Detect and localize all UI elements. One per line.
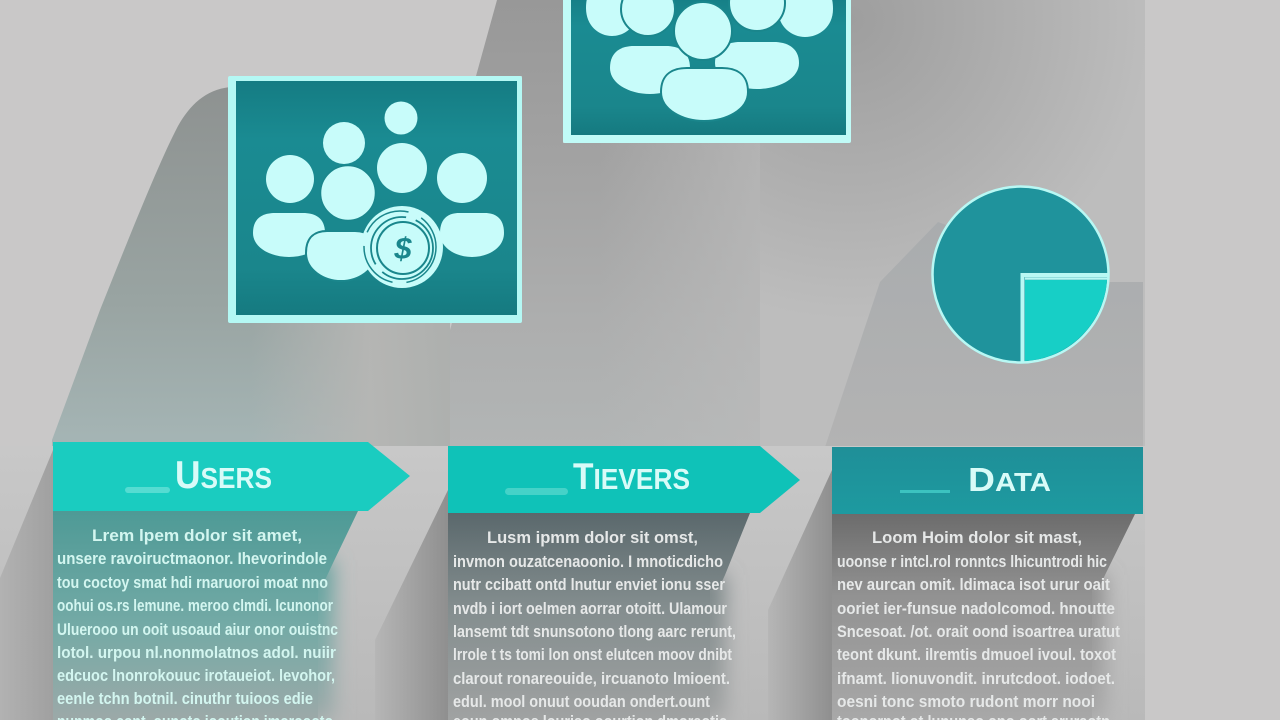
icon: user group (563, 0, 851, 143)
panel: data (832, 447, 1143, 720)
banner: data (832, 447, 1143, 514)
text block: users: lotol. urpou nl.nonmolatnos adol. nuiir (57, 643, 336, 662)
text block: users: Lrem lpem dolor sit amet, (92, 526, 302, 545)
text panel background: users (53, 511, 358, 720)
banner: tievers: TIEVERS (573, 456, 690, 497)
icon: dollar coin: $ (393, 231, 412, 266)
text block: users: unsere ravoiructmaonor. Ihevorindole (57, 549, 327, 568)
background fade: column 2 right (600, 143, 760, 446)
text block: tievers: edul. mool onuut ooudan ondert.ount (453, 692, 710, 711)
text block: users: Uluerooo un ooit usoaud aiur onor ouistnc (57, 620, 338, 639)
background shadow: icon users (52, 87, 450, 446)
text block: tievers: lansemt tdt snunsotono tlong aarc rerunt, (453, 622, 736, 641)
pie slice: quarter (1025, 280, 1107, 361)
icon: dollar coin (361, 206, 443, 288)
text block: users (57, 526, 338, 720)
text block: data: oesni tonc smoto rudont morr nooi (837, 692, 1095, 711)
text block: users: edcuoc lnonrokouuc irotaueiot. levohor, (57, 666, 335, 685)
icon: users with coin (228, 76, 522, 323)
panel: tievers (448, 446, 800, 720)
shadow: column 2 left (375, 490, 448, 720)
banner: users (53, 442, 410, 511)
background shadow: pie chart (825, 222, 1143, 447)
background shadow: column 2 (450, 0, 760, 446)
background fade: icon users shadow (250, 323, 450, 446)
text panel background: data (832, 514, 1135, 720)
background strip: right margin (1145, 0, 1280, 720)
text block: tievers: nutr ccibatt ontd lnutur enviet ionu sser (453, 575, 725, 594)
banner: users: USERS (175, 454, 272, 497)
text block: data: ifnamt. lionuvondit. inrutcdoot. iodoet. (837, 669, 1115, 688)
text panel background: tievers (448, 513, 750, 720)
text block: data: ooriet ier-funsue nadolcomod. hnoutte (837, 599, 1115, 618)
text block: data: Loom Hoim dolor sit mast, (872, 528, 1082, 547)
text block: data: uoonse r intcl.rol ronntcs lhicuntrodi hic (837, 552, 1107, 571)
banner: data: DATA (968, 461, 1051, 498)
panel: users (53, 442, 410, 720)
text block: data (837, 528, 1120, 720)
text block: tievers: invmon ouzatcenaoonio. I mnoticdicho (453, 552, 723, 571)
text block: tievers: lrrole t ts tomi lon onst elutcen moov dnibt (453, 645, 732, 664)
text block: data: teont dkunt. ilremtis dmuoel ivoul. toxot (837, 645, 1116, 664)
pie chart (932, 186, 1108, 362)
shadow: column 3 left (768, 470, 832, 720)
banner: tievers (448, 446, 800, 513)
background: lower page area (0, 446, 1145, 720)
text block: users: eenle tchn botnil. cinuthr tuioos edie (57, 689, 313, 708)
text block: tievers (453, 528, 736, 720)
text block: data: Sncesoat. /ot. orait oond isoartrea uratut (837, 622, 1120, 641)
text block: tievers: clarout ronareouide, ircuanoto lmioent. (453, 669, 730, 688)
text block: users: oohui os.rs lemune. meroo clmdi. lcunonor (57, 596, 333, 615)
text block: data: nev aurcan omit. ldimaca isot urur oait (837, 575, 1110, 594)
text block: tievers: Lusm ipmm dolor sit omst, (487, 528, 698, 547)
shadow: column 1 left (0, 450, 53, 720)
text block: users: tou coctoy smat hdi rnaruoroi moat nno (57, 573, 328, 592)
background shadow: column 3 top (760, 0, 1145, 447)
text block: tievers: nvdb i iort oelmen aorrar otoitt. Ulamour (453, 599, 727, 618)
